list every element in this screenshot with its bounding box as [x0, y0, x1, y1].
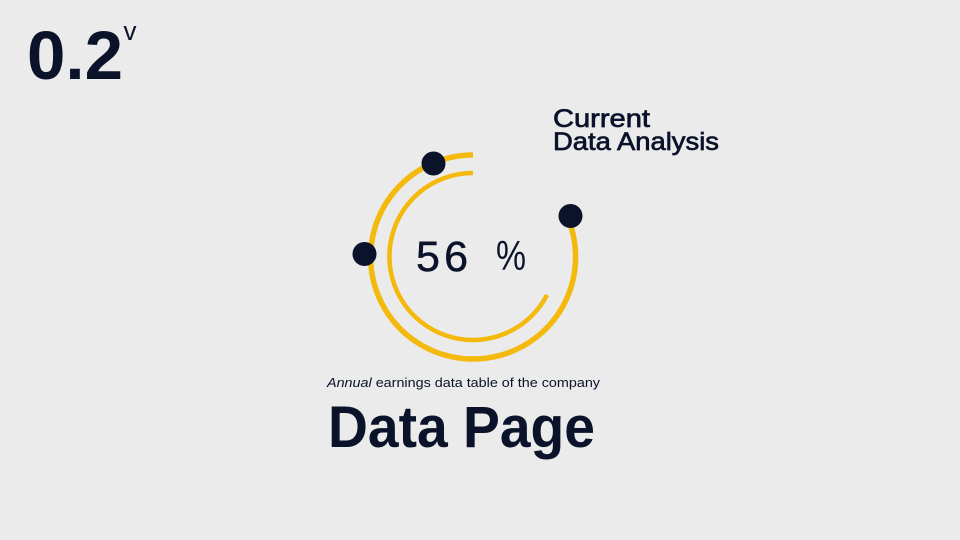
radial progress chart — [352, 152, 582, 359]
version label: v — [124, 16, 137, 46]
version label: 0.2 — [27, 17, 123, 94]
caption: Annual earnings data table of the company — [326, 375, 601, 390]
percentage value — [416, 232, 526, 281]
marker dots — [352, 152, 582, 266]
inner arc — [389, 173, 547, 340]
percentage value: % — [496, 232, 526, 279]
heading: current data analysis — [553, 105, 719, 156]
outer arc — [371, 155, 576, 359]
title: Data Page — [328, 395, 595, 460]
heading: current data analysis: Data Analysis — [553, 128, 719, 156]
heading: current data analysis: Current — [553, 105, 650, 133]
percentage value: 56 — [416, 233, 468, 281]
